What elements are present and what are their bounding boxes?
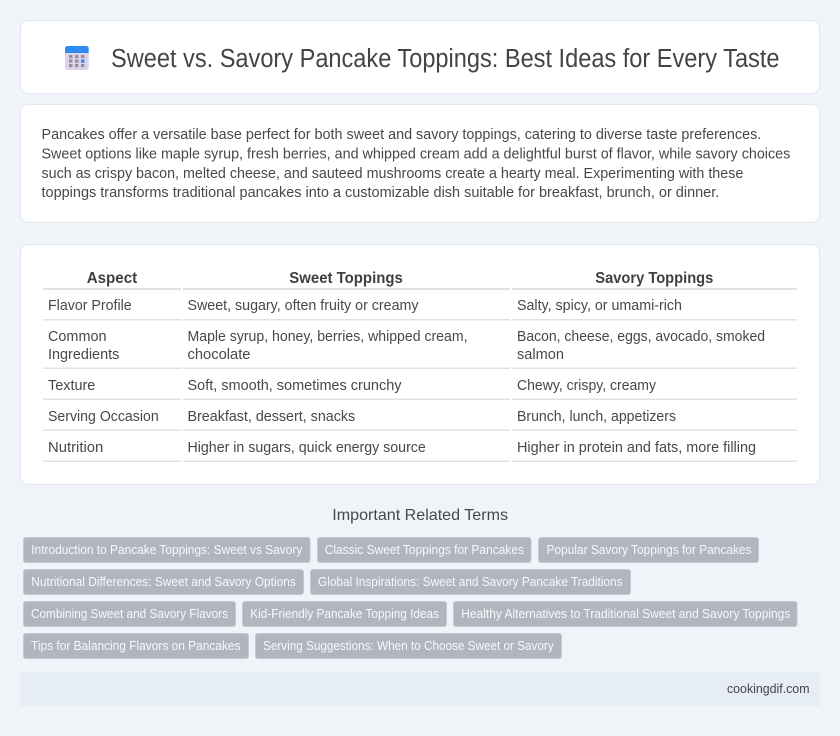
row: nutrition: Higher in sugars, quick energy source bbox=[188, 440, 426, 456]
row: nutrition bbox=[48, 440, 756, 456]
tag: Global Inspirations: Sweet and Savory Pancake Traditions bbox=[318, 574, 623, 589]
row: common ingredients bbox=[48, 329, 765, 363]
intro paragraph: such as crispy bacon, melted cheese, and sauteed mushrooms create a hearty meal. Experimenting with these bbox=[42, 165, 743, 182]
row: flavor profile bbox=[48, 298, 682, 314]
intro paragraph: Pancakes offer a versatile base perfect for both sweet and savory toppings, catering to diverse taste preferences. bbox=[42, 126, 761, 143]
row: texture: Texture bbox=[48, 378, 95, 394]
intro paragraph: toppings transforms traditional pancakes into a customizable dish suitable for breakfast, brunch, or dinner. bbox=[42, 184, 719, 201]
tag: Classic Sweet Toppings for Pancakes bbox=[325, 542, 524, 557]
table header: Savory Toppings bbox=[595, 270, 714, 287]
footer bbox=[20, 672, 820, 706]
row: flavor profile: Sweet, sugary, often fruity or creamy bbox=[188, 298, 419, 314]
row: common ingredients: Maple syrup, honey, berries, whipped cream, bbox=[188, 329, 468, 345]
row: serving occasion bbox=[48, 409, 676, 425]
row: serving occasion: Serving Occasion bbox=[48, 409, 159, 425]
panel: title card bbox=[20, 20, 820, 94]
tag bbox=[318, 538, 531, 562]
row: common ingredients: salmon bbox=[517, 347, 564, 363]
panel: introduction bbox=[20, 104, 820, 222]
heading: important related terms: Important Related Terms bbox=[332, 507, 508, 524]
intro paragraph bbox=[42, 126, 790, 201]
source credit: cookingdif.com bbox=[727, 681, 810, 696]
tag: Serving Suggestions: When to Choose Sweet or Savory bbox=[263, 638, 554, 653]
row: flavor profile: Salty, spicy, or umami-rich bbox=[517, 298, 682, 314]
tag: Combining Sweet and Savory Flavors bbox=[31, 606, 228, 621]
row: texture: Chewy, crispy, creamy bbox=[517, 378, 657, 394]
tag: Nutritional Differences: Sweet and Savory Options bbox=[31, 574, 296, 589]
tag bbox=[24, 634, 248, 658]
row: common ingredients: Ingredients bbox=[48, 347, 119, 363]
row: nutrition: Nutrition bbox=[48, 440, 103, 456]
icon: calendar bbox=[65, 46, 89, 70]
tag: Tips for Balancing Flavors on Pancakes bbox=[31, 638, 241, 653]
tag bbox=[24, 570, 304, 594]
row: common ingredients: chocolate bbox=[188, 347, 250, 363]
row: common ingredients: Common bbox=[48, 329, 106, 345]
panel: comparison table bbox=[20, 244, 820, 484]
row: texture bbox=[48, 378, 657, 394]
tag: Healthy Alternatives to Traditional Sweet and Savory Toppings bbox=[461, 606, 791, 621]
tag: Kid-Friendly Pancake Topping Ideas bbox=[250, 606, 439, 621]
intro paragraph: Sweet options like maple syrup, fresh berries, and whipped cream add a delightful burst of flavor, while savory choices bbox=[42, 146, 790, 162]
tag: Introduction to Pancake Toppings: Sweet vs Savory bbox=[31, 542, 303, 557]
tag bbox=[24, 602, 236, 626]
tag list bbox=[24, 538, 797, 658]
tag bbox=[256, 634, 562, 658]
row: texture: Soft, smooth, sometimes crunchy bbox=[188, 378, 402, 394]
tag: Popular Savory Toppings for Pancakes bbox=[546, 542, 752, 557]
row: common ingredients: Bacon, cheese, eggs, avocado, smoked bbox=[517, 329, 765, 345]
table header: Aspect bbox=[87, 270, 137, 287]
table header: Sweet Toppings bbox=[289, 270, 403, 287]
title: Sweet vs. Savory Pancake Toppings: Best Ideas for Every Taste bbox=[111, 45, 780, 73]
table header bbox=[87, 270, 714, 287]
row: flavor profile: Flavor Profile bbox=[48, 298, 132, 314]
tag bbox=[24, 538, 310, 562]
row: serving occasion: Breakfast, dessert, snacks bbox=[188, 409, 355, 425]
tag bbox=[242, 602, 446, 626]
row: nutrition: Higher in protein and fats, more filling bbox=[517, 440, 756, 456]
tag bbox=[454, 602, 797, 626]
tag bbox=[538, 538, 758, 562]
row: serving occasion: Brunch, lunch, appetizers bbox=[517, 409, 676, 425]
tag bbox=[310, 570, 630, 594]
